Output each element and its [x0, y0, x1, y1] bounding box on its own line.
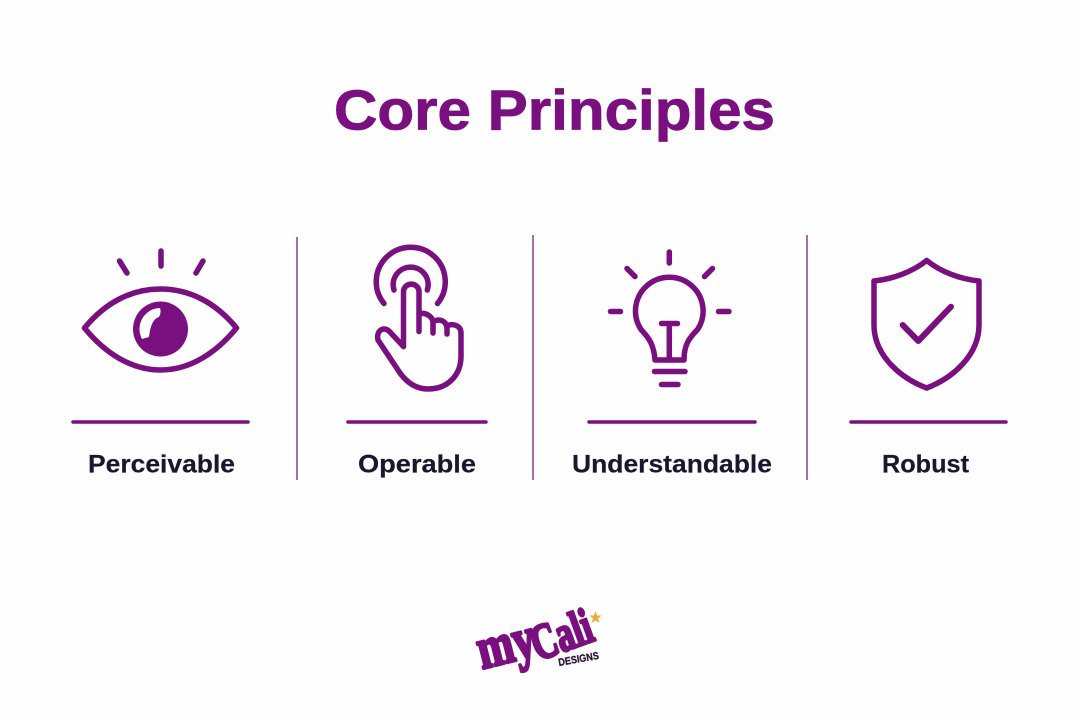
logo wordmark: Cali: Cali: [523, 597, 600, 671]
panel: operable: [348, 247, 486, 478]
panel: understandable: [572, 252, 772, 478]
icon: light bulb: [610, 252, 729, 384]
label: understandable: Understandable: [572, 450, 772, 478]
label: robust: Robust: [882, 450, 970, 478]
panel: robust: [851, 260, 1006, 478]
title: Core Principles: [334, 78, 775, 142]
icon: shield with check: [874, 260, 979, 388]
icon: eye: [84, 251, 236, 370]
underline: operable: [348, 420, 486, 424]
icon: pointing hand: [376, 247, 461, 389]
label: perceivable: Perceivable: [88, 450, 235, 478]
logo star: [590, 611, 602, 623]
logo wordmark: my: my: [469, 605, 541, 682]
panel: perceivable: [73, 251, 248, 478]
logo: [469, 597, 602, 682]
underline: understandable: [589, 420, 755, 424]
underline: robust: [851, 420, 1006, 424]
underline: perceivable: [73, 420, 248, 424]
logo tagline: DESIGNS: [557, 650, 600, 669]
label: operable: Operable: [358, 450, 476, 478]
